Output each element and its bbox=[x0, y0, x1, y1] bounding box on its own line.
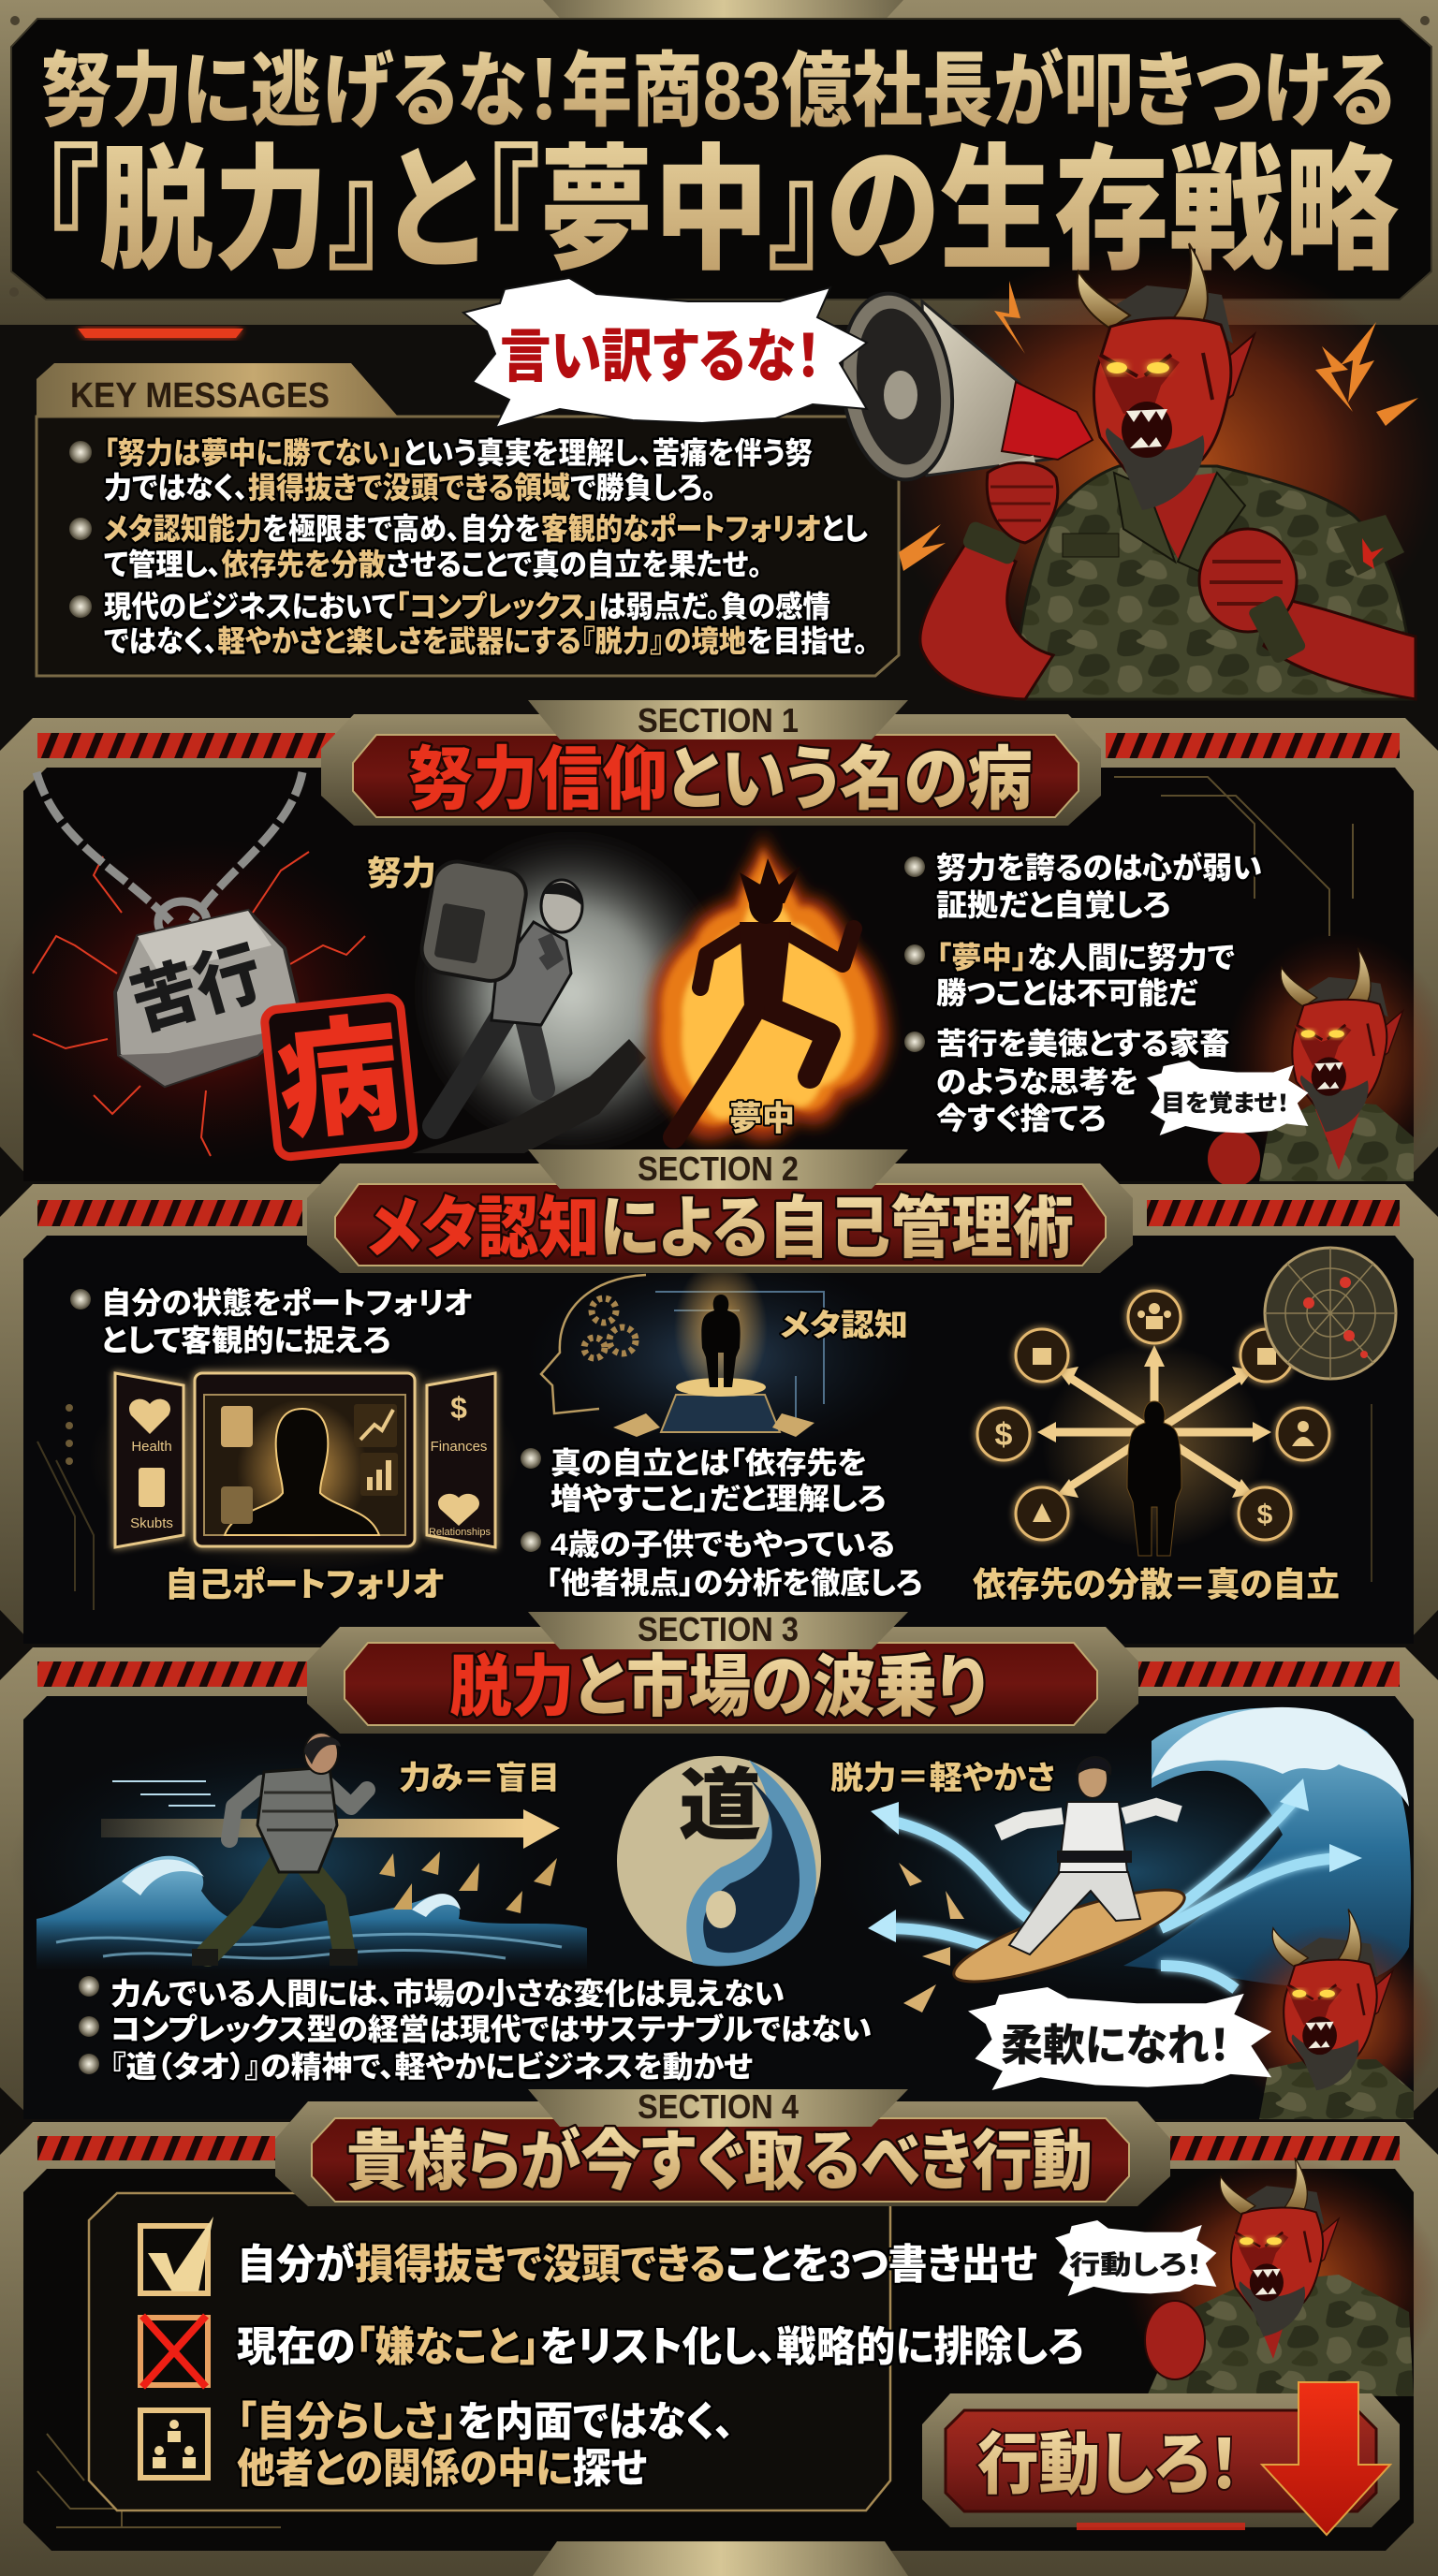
section 3 bullets: 『道（タオ）』の精神で、軽やかにビジネスを動かせ bbox=[110, 2050, 753, 2084]
illustration: self portfolio dashboard: Finances bbox=[431, 1439, 487, 1455]
label: immersion: 夢中 bbox=[729, 1099, 795, 1137]
action 1: 自分が損得抜きで没頭できることを3つ書き出せ bbox=[237, 2241, 1037, 2288]
panel: action list bbox=[89, 2193, 1083, 2510]
fist on megaphone bbox=[987, 462, 1058, 543]
chain bbox=[37, 772, 302, 943]
section 2 center bullets bbox=[521, 1446, 922, 1600]
flow arrows bbox=[885, 1797, 1339, 1989]
label: metacognition: メタ認知 bbox=[780, 1308, 908, 1342]
arrow: tension bbox=[101, 1809, 560, 1849]
waves bbox=[37, 1856, 587, 1970]
section 2 center bullets: 「他者視点」の分析を徹底しろ bbox=[546, 1566, 922, 1600]
arrow: down bbox=[1262, 2382, 1390, 2535]
callout: be flexible bbox=[968, 1987, 1271, 2090]
section 3 bullets: 力んでいる人間には、市場の小さな変化は見えない bbox=[110, 1977, 785, 2011]
section 1 header bbox=[321, 700, 1101, 826]
icon: people box bbox=[140, 2410, 208, 2478]
section 1 bullets bbox=[904, 851, 1262, 1135]
illustration: self portfolio dashboard: Relationships bbox=[429, 1527, 492, 1538]
illustration: surfer on wave bbox=[824, 1707, 1438, 2012]
section 3 bullets: コンプレックス型の経営は現代ではサステナブルではない bbox=[110, 2012, 872, 2046]
bullet 2: て管理し、依存先を分散させることで真の自立を果たせ。 bbox=[104, 548, 762, 581]
bullet 1 bbox=[69, 436, 813, 505]
section 2 first bullet: として客観的に捉えろ bbox=[101, 1324, 390, 1357]
illustration: dependency network: $ bbox=[995, 1417, 1013, 1453]
illustration: dependency network: $ bbox=[1257, 1500, 1273, 1530]
callout: act bbox=[1055, 2220, 1216, 2296]
devil: section 1 bbox=[1208, 931, 1438, 1187]
right arm bbox=[1264, 599, 1416, 699]
Tao glyph: 道 bbox=[679, 1762, 761, 1850]
bullet 2 bbox=[69, 512, 868, 581]
section 1 bullets: のような思考を bbox=[936, 1065, 1138, 1099]
section 4 label: SECTION 4 bbox=[638, 2087, 799, 2126]
soldier bbox=[208, 1783, 367, 1954]
bullet 3: 現代のビジネスにおいて「コンプレックス」は弱点だ。負の感情 bbox=[104, 590, 830, 623]
section 3 header bbox=[307, 1610, 1138, 1734]
callout: no excuses: 言い訳するな！ bbox=[500, 325, 821, 389]
section 2 title: メタ認知による自己管理術 bbox=[367, 1192, 1074, 1266]
section 2 center bullets: 真の自立とは「依存先を bbox=[550, 1446, 867, 1480]
megaphone bbox=[830, 286, 1093, 528]
key messages heading: KEY MESSAGES bbox=[70, 376, 330, 416]
label: self portfolio: 自己ポートフォリオ bbox=[165, 1565, 445, 1603]
section 1 bullets: 今すぐ捨てろ bbox=[936, 1102, 1106, 1135]
main devil with megaphone bbox=[830, 243, 1418, 699]
panel: key messages bbox=[37, 363, 899, 676]
button label: 行動しろ！ bbox=[977, 2428, 1240, 2503]
illustration: self portfolio dashboard: Health bbox=[131, 1439, 172, 1455]
orange glow behind devil bbox=[880, 243, 1438, 693]
illustration: flaming runner bbox=[650, 831, 889, 1141]
bullet 3 bbox=[69, 590, 868, 658]
left arm bbox=[920, 538, 1053, 699]
illustration: struggling man bbox=[412, 828, 730, 1156]
callout: be flexible: 柔軟になれ！ bbox=[1001, 2021, 1230, 2070]
section 3 bullets bbox=[79, 1976, 872, 2084]
section 1 label: SECTION 1 bbox=[638, 701, 799, 739]
section 2 center bullets: 増やすこと」だと理解しろ bbox=[550, 1482, 886, 1515]
stone bbox=[115, 911, 302, 1086]
devil: section 3 bbox=[1226, 1909, 1438, 2120]
section 2 header bbox=[307, 1149, 1133, 1273]
section 2 first bullet: 自分の状態をポートフォリオ bbox=[101, 1286, 473, 1320]
big wave bbox=[1123, 1708, 1411, 1986]
stone label: 苦行 bbox=[124, 933, 271, 1044]
section 3 title: 脱力と市場の波乗り bbox=[449, 1650, 987, 1725]
section 1 title: 努力信仰という名の病 bbox=[408, 740, 1033, 818]
devil: section 4 bbox=[1123, 2158, 1438, 2410]
bullet 2: メタ認知能力を極限まで高め、自分を客観的なポートフォリオとし bbox=[104, 512, 868, 546]
stamp: 病: 病 bbox=[271, 1003, 407, 1156]
section 4 header bbox=[275, 2087, 1170, 2206]
silhouette bbox=[225, 1409, 379, 1535]
icon: cross box bbox=[140, 2316, 208, 2387]
section 1 bullets: 証拠だと自覚しろ bbox=[936, 888, 1170, 922]
section 2 center bullets: 4歳の子供でもやっている bbox=[550, 1528, 895, 1561]
panel: action list: 他者との関係の中に探せ bbox=[237, 2446, 647, 2492]
section 1 bullets: 「夢中」な人間に努力で bbox=[936, 941, 1236, 974]
callout: no excuses bbox=[463, 278, 867, 428]
panel: section 2 frame bbox=[0, 1184, 1438, 1644]
torso bbox=[1016, 466, 1416, 699]
panel: section 1 frame bbox=[0, 718, 1438, 1181]
section 2 first bullet bbox=[70, 1286, 473, 1357]
silhouette bbox=[1127, 1401, 1181, 1556]
section 1 bullets: 勝つことは不可能だ bbox=[936, 976, 1199, 1010]
illustration: dependency network bbox=[977, 1291, 1329, 1556]
illustration: self portfolio dashboard: $ bbox=[450, 1391, 467, 1425]
illustration: stiff soldier in waves bbox=[9, 1732, 587, 1994]
button: act now bbox=[922, 2393, 1400, 2530]
illustration: self portfolio dashboard bbox=[89, 1348, 520, 1573]
illustration: self portfolio dashboard: Skubts bbox=[130, 1515, 173, 1531]
icon: yin yang Tao bbox=[617, 1756, 821, 1967]
bullet 1: 「努力は夢中に勝てない」という真実を理解し、苦痛を伴う努 bbox=[104, 436, 813, 470]
red indicator light bbox=[78, 329, 243, 338]
section 1 bullets: 努力を誇るのは心が弱い bbox=[936, 851, 1262, 885]
label: stiffness: 力み＝盲目 bbox=[399, 1761, 560, 1796]
surfer bbox=[998, 1757, 1180, 1954]
icon: radar bbox=[1265, 1248, 1396, 1379]
surfboard bbox=[946, 1873, 1192, 1998]
callout: wake up bbox=[1147, 1061, 1308, 1135]
section 1 bullets: 苦行を美徳とする家畜 bbox=[936, 1027, 1230, 1061]
standing figure bbox=[701, 1295, 741, 1387]
label: dependency: 依存先の分散＝真の自立 bbox=[973, 1565, 1340, 1603]
section 3 label: SECTION 3 bbox=[638, 1610, 799, 1648]
icon: checkbox bbox=[140, 2217, 213, 2293]
action 2: 現在の「嫌なこと」をリスト化し、戦略的に排除しろ bbox=[237, 2324, 1083, 2370]
illustration: chained stone 苦行 bbox=[0, 772, 403, 1165]
action 3: 「自分らしさ」を内面ではなく、 bbox=[237, 2399, 734, 2445]
callout: act: 行動しろ！ bbox=[1069, 2250, 1202, 2279]
title banner bbox=[0, 0, 1438, 325]
illustration: metacognition bbox=[524, 1254, 917, 1460]
head bbox=[1078, 243, 1255, 510]
section 4 title: 貴様らが今すぐ取るべき行動 bbox=[346, 2125, 1093, 2198]
bullet 1: 力ではなく、損得抜きで没頭できる領域で勝負しろ。 bbox=[104, 471, 716, 505]
bullet 3: ではなく、軽やかさと楽しさを武器にする『脱力』の境地を目指せ。 bbox=[104, 624, 868, 658]
panel: section 3 frame bbox=[0, 1647, 1438, 2119]
panel: section 4 frame bbox=[0, 2122, 1438, 2576]
label: relaxation: 脱力＝軽やかさ bbox=[830, 1761, 1055, 1796]
section 2 label: SECTION 2 bbox=[638, 1149, 799, 1188]
callout: wake up: 目を覚ませ！ bbox=[1161, 1090, 1289, 1117]
label: effort: 努力 bbox=[367, 854, 436, 892]
